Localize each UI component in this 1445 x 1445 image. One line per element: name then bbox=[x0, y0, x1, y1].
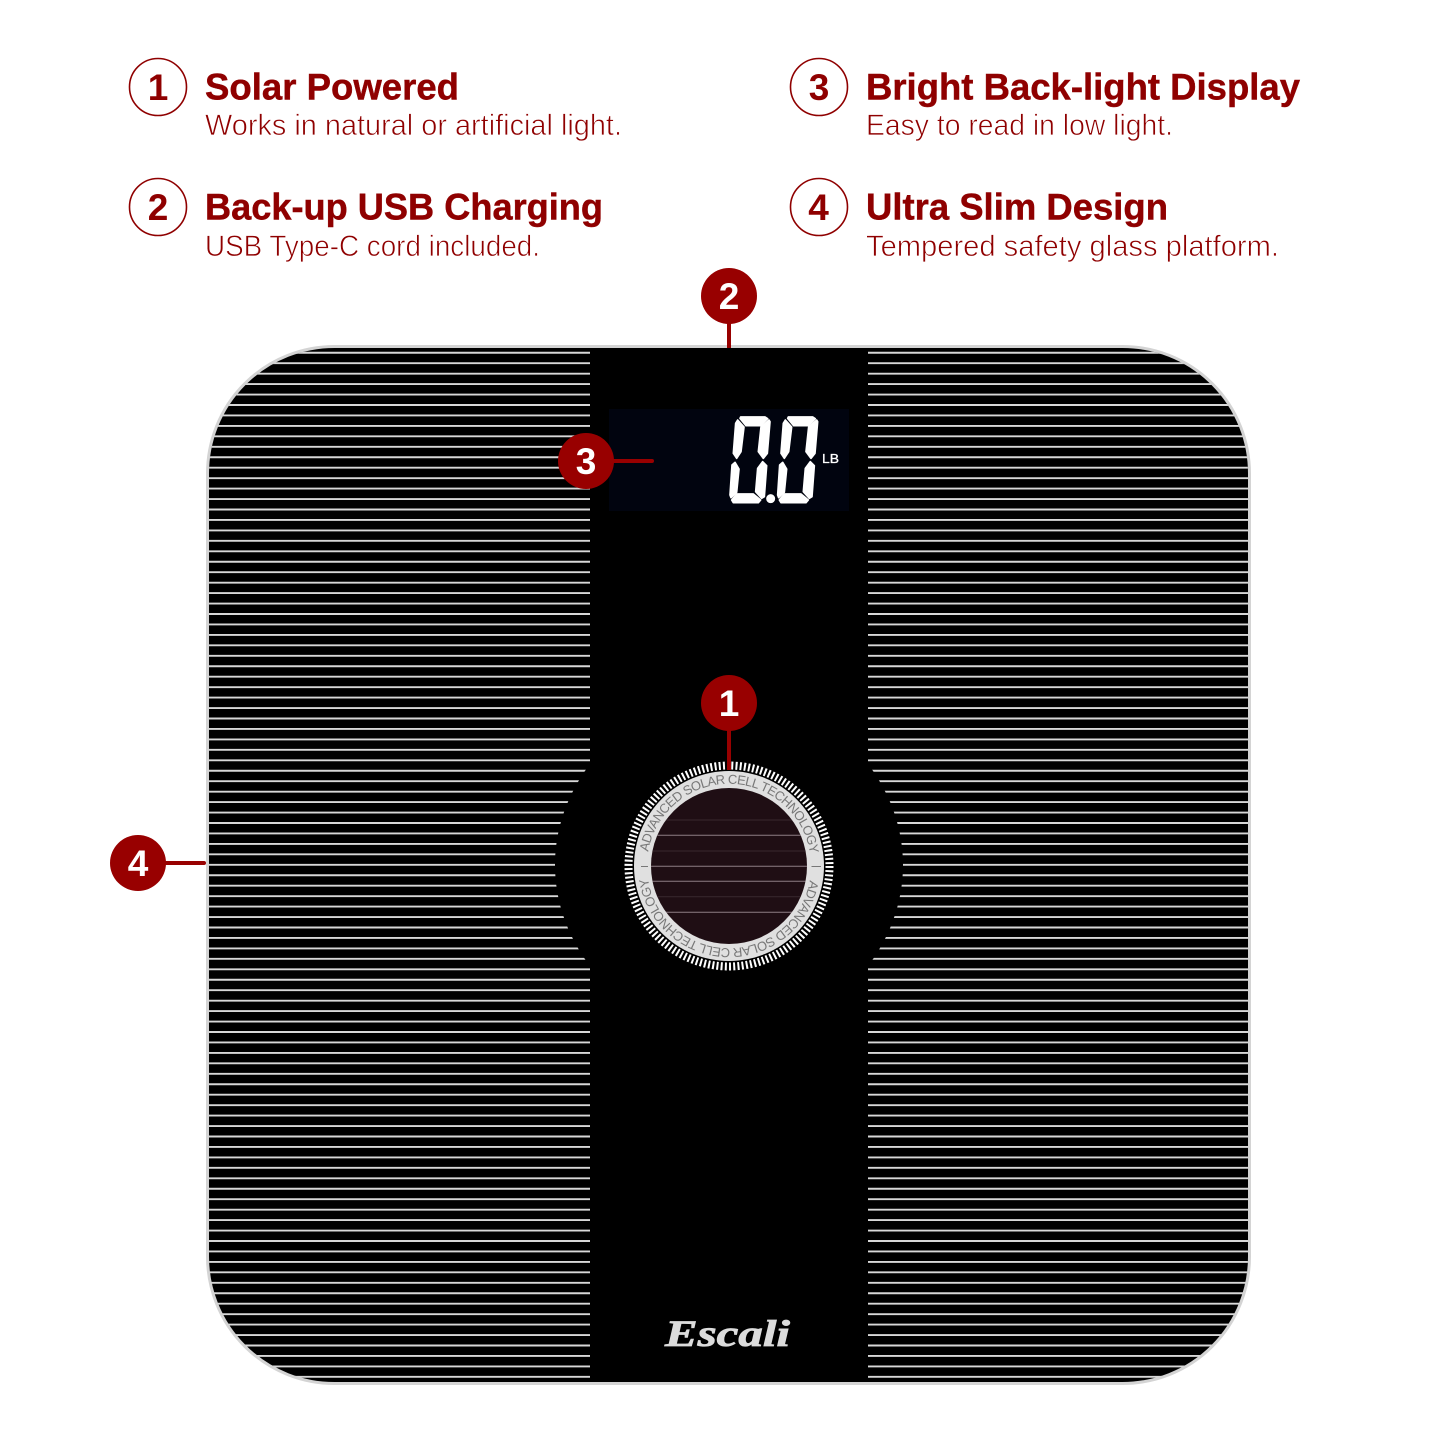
solar cell dial bbox=[624, 762, 834, 970]
scale body bbox=[206, 345, 1251, 1385]
LCD display: LB bbox=[822, 451, 839, 466]
brand logo: Escali bbox=[664, 1314, 791, 1355]
feature 2: back-up USB charging bbox=[130, 178, 603, 263]
feature 1: solar powered: 1 bbox=[148, 67, 168, 108]
feature 1: solar powered bbox=[130, 58, 622, 142]
marker 4: slim edge bbox=[110, 835, 206, 891]
feature 1: solar powered: Solar Powered bbox=[205, 66, 459, 108]
feature 3: bright back-light display: Easy to read in low light. bbox=[866, 109, 1173, 142]
feature 3: bright back-light display: Bright Back-light Display bbox=[866, 66, 1300, 108]
solar cell dial: ADVANCED SOLAR CELL TECHNOLOGY bbox=[640, 774, 819, 852]
feature 1: solar powered: Works in natural or artificial light. bbox=[205, 109, 622, 142]
feature 4: ultra slim design: Tempered safety glass platform. bbox=[866, 230, 1279, 263]
solar cell dial: ADVANCED SOLAR CELL TECHNOLOGY bbox=[639, 880, 818, 958]
marker 3: display: 3 bbox=[576, 441, 596, 482]
marker 3: display bbox=[558, 433, 654, 489]
feature 4: ultra slim design: Ultra Slim Design bbox=[866, 186, 1168, 228]
marker 2: USB port bbox=[701, 268, 757, 348]
feature 2: back-up USB charging: 2 bbox=[148, 187, 168, 228]
feature 2: back-up USB charging: USB Type-C cord included. bbox=[205, 230, 540, 263]
marker 1: solar cell bbox=[701, 675, 757, 770]
feature 3: bright back-light display: 3 bbox=[809, 67, 829, 108]
feature 3: bright back-light display bbox=[790, 58, 1300, 142]
marker 2: USB port: 2 bbox=[719, 276, 739, 317]
feature 4: ultra slim design bbox=[790, 178, 1279, 263]
marker 1: solar cell: 1 bbox=[719, 683, 739, 724]
marker 4: slim edge: 4 bbox=[128, 843, 149, 884]
LCD display bbox=[609, 409, 849, 511]
feature 2: back-up USB charging: Back-up USB Charging bbox=[205, 186, 603, 228]
feature 4: ultra slim design: 4 bbox=[808, 187, 829, 228]
infographic bbox=[110, 58, 1300, 1385]
